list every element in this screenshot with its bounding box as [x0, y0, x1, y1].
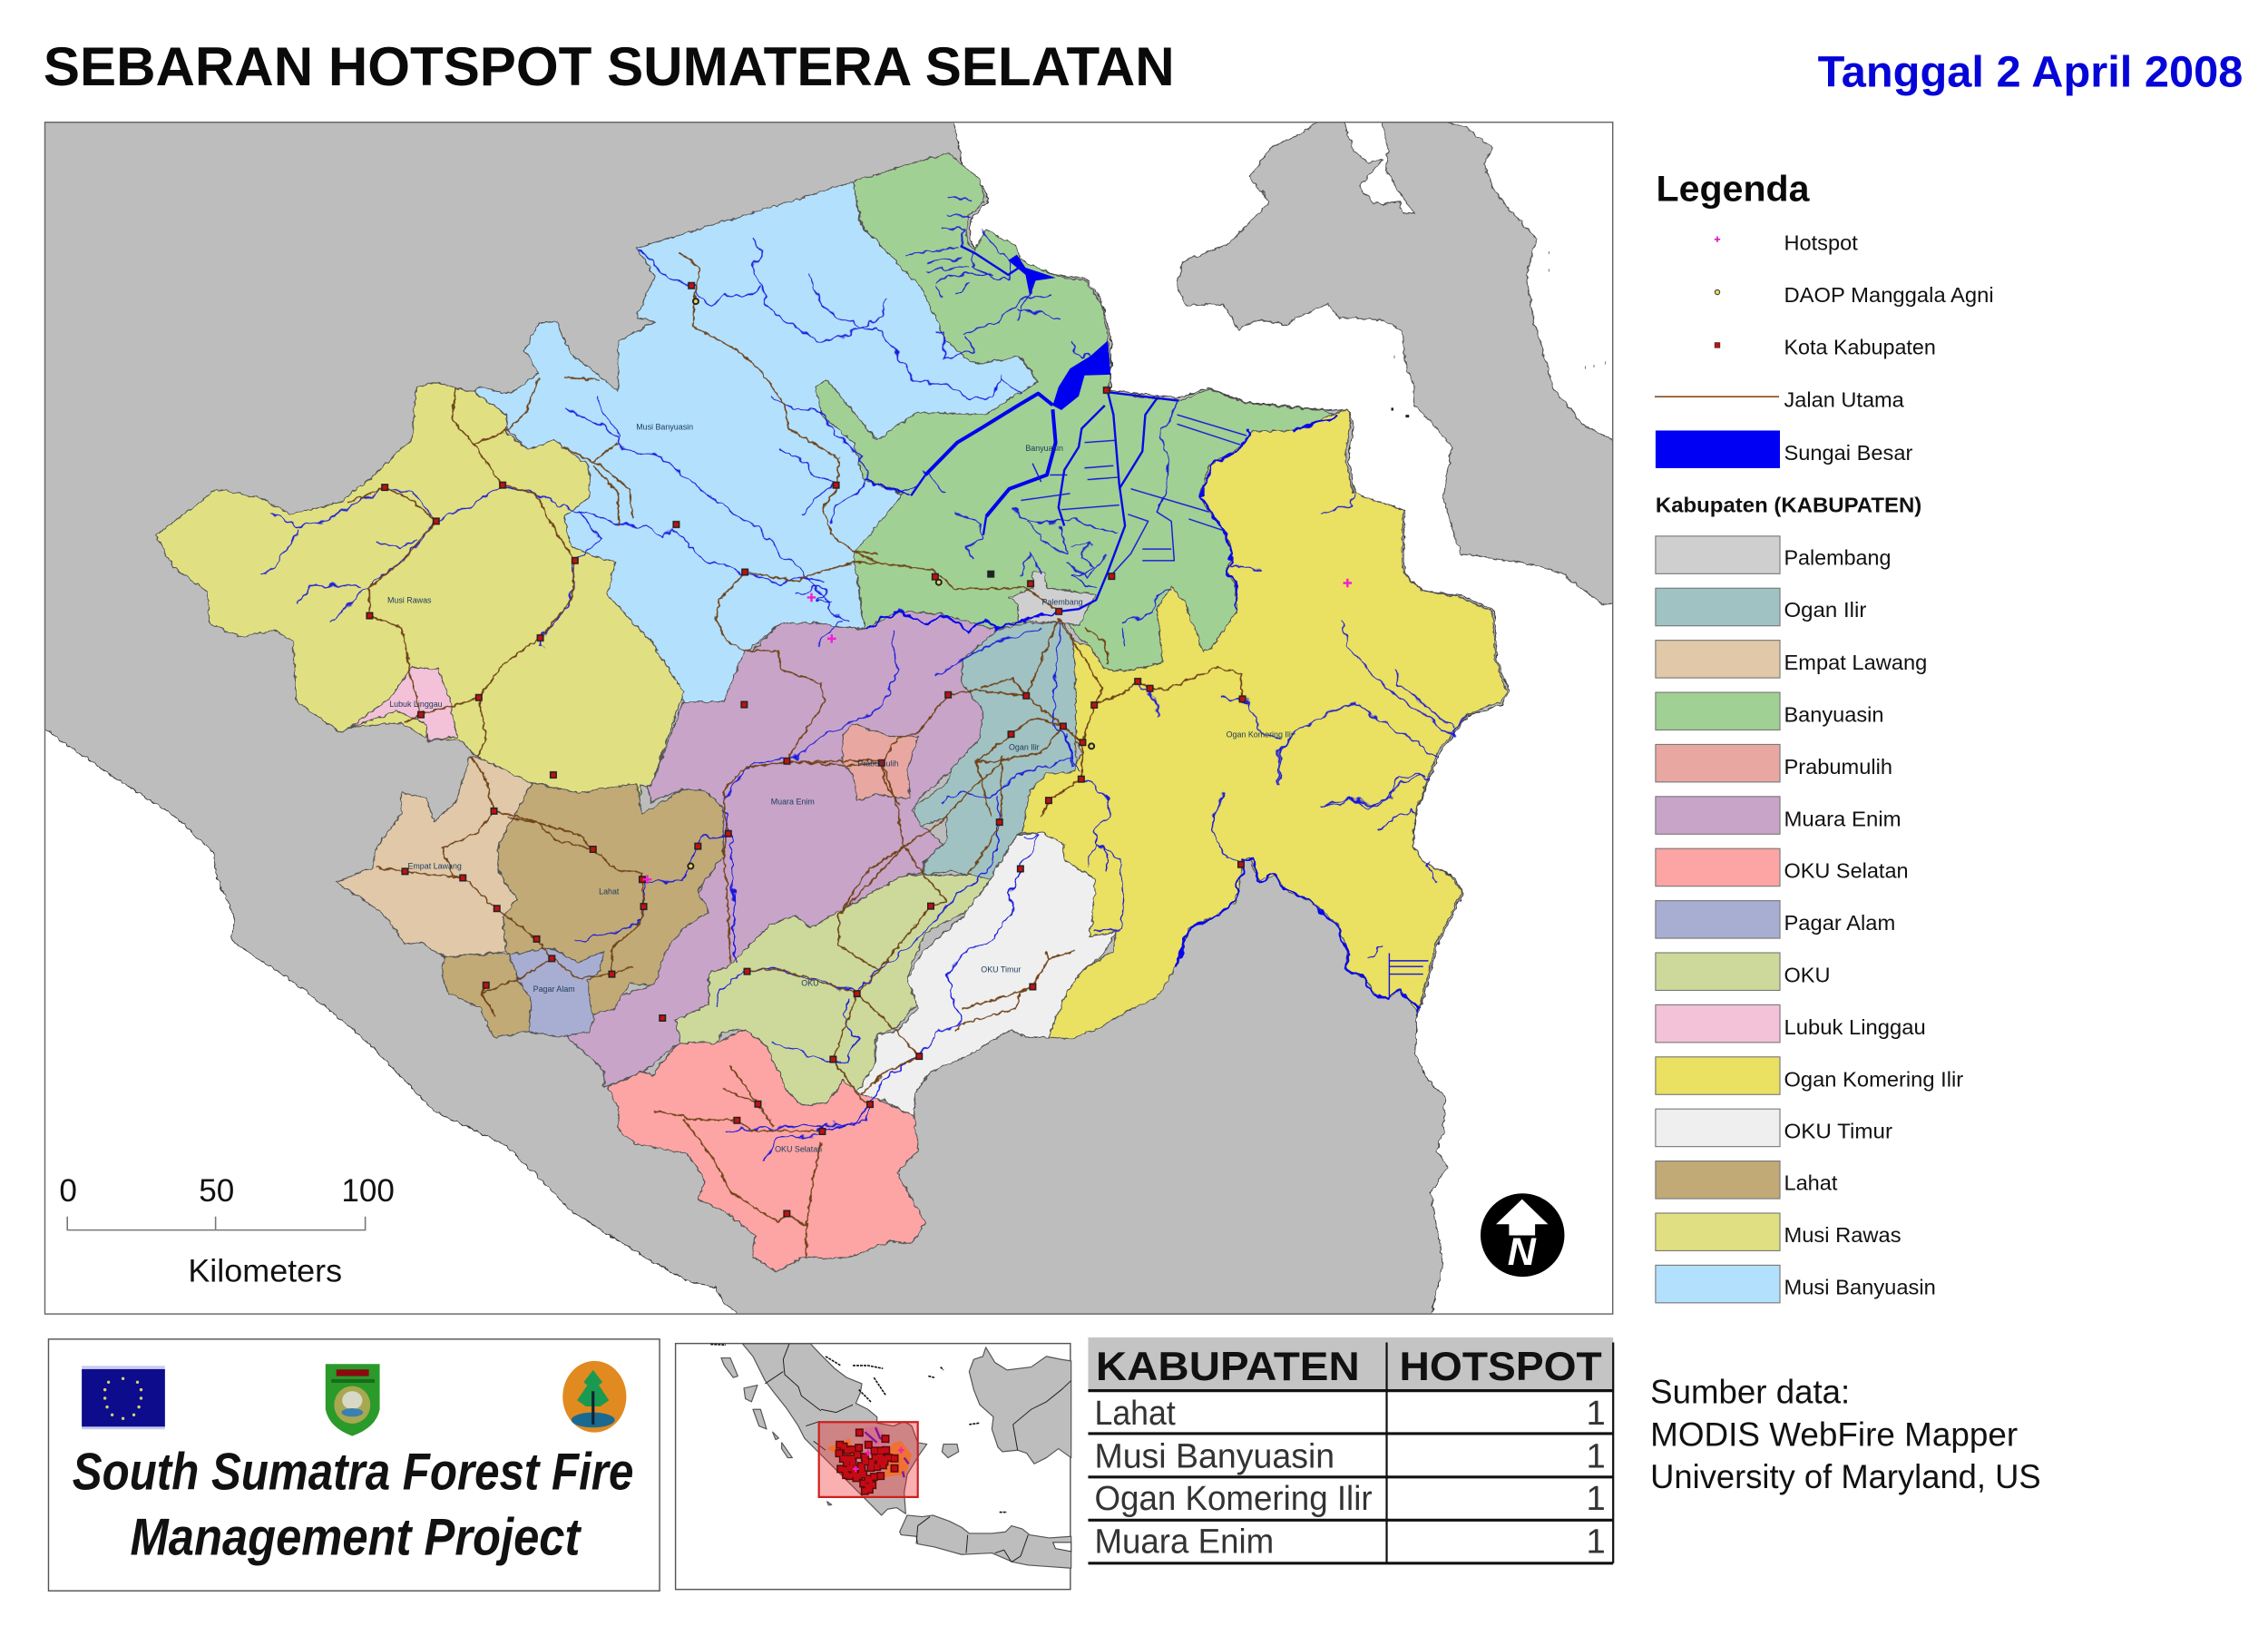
legend: DAOP Manggala Agni: DAOP Manggala Agni: [1784, 283, 1994, 307]
icon: South Sumatra shield: [326, 1364, 380, 1436]
kabupaten: Banyuasin: [816, 153, 1339, 671]
icon: north arrow: N: [1508, 1230, 1537, 1274]
small islands: [1391, 253, 1606, 416]
kabupaten: Empat Lawang: [337, 757, 532, 957]
region labels: Empat Lawang: [407, 862, 462, 871]
meandering border rivers: [865, 416, 1417, 1010]
legend labels: [1784, 546, 1963, 1298]
panel: project logos: [48, 1339, 660, 1591]
table: hotspots per kabupaten: 1: [1586, 1436, 1606, 1475]
hotspot markers: [643, 579, 1352, 884]
inset extent box: [819, 1422, 918, 1497]
table: hotspots per kabupaten: Musi Banyuasin: [1094, 1436, 1334, 1475]
icon: forestry emblem: [562, 1361, 626, 1433]
icon: north arrow: [1481, 1193, 1564, 1277]
kabupaten: Prabumulih: [843, 724, 918, 801]
legend: [1655, 170, 1994, 1303]
table: hotspots per kabupaten: [1088, 1337, 1613, 1563]
legend labels: Ogan Ilir: [1784, 598, 1867, 622]
rivers south-west: [575, 810, 870, 1161]
inset islands: [721, 1358, 959, 1505]
legend labels: OKU Selatan: [1784, 859, 1909, 883]
region labels: Musi Rawas: [387, 596, 432, 605]
town markers: [369, 286, 1243, 1214]
project name: South Sumatra Forest Fire: [73, 1444, 633, 1502]
region labels: Lubuk Linggau: [389, 700, 443, 709]
legend subheading: Kabupaten (KABUPATEN): [1656, 494, 1921, 517]
table: hotspots per kabupaten: KABUPATEN: [1096, 1345, 1360, 1389]
scale bar: [59, 1173, 395, 1288]
scale bar: Kilometers: [188, 1253, 342, 1288]
panel: inset locator map: [676, 1344, 1071, 1590]
main roads: [347, 252, 1243, 1257]
legend labels: OKU Timur: [1784, 1120, 1892, 1143]
table: hotspots per kabupaten: HOTSPOT: [1400, 1345, 1602, 1389]
roads north-west: [347, 252, 1103, 817]
region labels: Ogan Ilir: [1009, 742, 1040, 751]
kabupaten: Musi Rawas: [155, 382, 683, 803]
rivers south-east: [819, 733, 1436, 1131]
inset internal boundaries and island chains: [765, 1344, 1071, 1562]
kabupaten: OKU Timur: [855, 833, 1116, 1116]
scale bar: 100: [341, 1173, 395, 1209]
kabupaten: Lubuk Linggau: [351, 667, 457, 741]
large river estuary: [1008, 255, 1110, 410]
legend labels: Banyuasin: [1784, 703, 1883, 727]
legend swatches: [1656, 536, 1780, 1303]
minor rivers: [264, 197, 1466, 1161]
date heading: Tanggal 2 April 2008: [1818, 49, 2243, 97]
region labels: Lahat: [599, 886, 620, 896]
map frame: [44, 122, 1613, 1314]
legend labels: Empat Lawang: [1784, 651, 1927, 674]
kabupaten: Muara Enim: [568, 612, 998, 1087]
legend: Kota Kabupaten: Kota Kabupaten: [1784, 336, 1936, 359]
legend: Kota Kabupaten: [1715, 336, 1936, 359]
kabupaten: Musi Banyuasin: [474, 181, 1038, 701]
icon: EU flag: [82, 1366, 165, 1429]
legend heading: Legenda: [1657, 170, 1810, 210]
region labels: Muara Enim: [771, 797, 815, 806]
region labels: [387, 423, 1294, 1153]
inset hotspots: [853, 1447, 904, 1472]
legend labels: Palembang: [1784, 546, 1891, 570]
region labels: Prabumulih: [857, 759, 898, 768]
scale bar: 0: [59, 1173, 77, 1209]
province and surrounding land polygons: [36, 112, 1628, 1324]
legend: Jalan Utama: Jalan Utama: [1784, 388, 1904, 412]
region labels: Palembang: [1042, 597, 1083, 606]
inset Java: [900, 1515, 1071, 1568]
table: hotspots per kabupaten: Ogan Komering Ilir: [1094, 1479, 1373, 1518]
title: SEBARAN HOTSPOT SUMATERA SELATAN: [44, 35, 1175, 97]
legend labels: OKU: [1784, 964, 1830, 987]
legend labels: Pagar Alam: [1784, 911, 1895, 935]
panel: project logos: Management Project: [131, 1508, 582, 1566]
table: hotspots per kabupaten: 1: [1586, 1479, 1606, 1518]
data source note: MODIS WebFire Mapper: [1650, 1415, 2018, 1453]
big rivers: [925, 394, 1056, 516]
legend labels: Musi Banyuasin: [1784, 1275, 1936, 1298]
legend labels: Muara Enim: [1784, 807, 1901, 830]
region labels: Ogan Komering Ilir: [1227, 730, 1294, 740]
kabupaten: Lahat: [441, 783, 723, 1037]
legend labels: Prabumulih: [1784, 755, 1892, 779]
inset province fill: [827, 1438, 912, 1477]
legend: hotspot: Hotspot: [1784, 230, 1858, 254]
rivers north-west: [264, 241, 1041, 799]
table: hotspots per kabupaten: 1: [1586, 1394, 1606, 1433]
legend: Sungai Besar: [1656, 430, 1913, 468]
table: hotspots per kabupaten: Muara Enim: [1094, 1523, 1274, 1562]
kabupaten: OKU: [676, 875, 991, 1106]
region labels: OKU Timur: [981, 965, 1021, 974]
straight canals: [1021, 415, 1428, 999]
kabupaten: Ogan Komering Ilir: [1022, 408, 1507, 1039]
land: Bangka island: [1178, 112, 1628, 604]
region labels: Musi Banyuasin: [636, 423, 693, 432]
main map: [36, 112, 1628, 1324]
kabupaten: OKU Selatan: [608, 1030, 925, 1272]
rivers east: [905, 197, 1466, 806]
roads south: [376, 757, 1074, 1257]
inset town cluster: [839, 1433, 894, 1491]
kabupaten: Ogan Ilir: [915, 623, 1076, 880]
legend labels: Ogan Komering Ilir: [1784, 1067, 1963, 1091]
kabupaten: Pagar Alam: [510, 947, 604, 1037]
table: hotspots per kabupaten: Lahat: [1094, 1394, 1176, 1433]
table: hotspots per kabupaten: 1: [1586, 1523, 1606, 1562]
inset Borneo: [969, 1347, 1071, 1464]
legend labels: Musi Rawas: [1784, 1223, 1901, 1247]
data source note: University of Maryland, US: [1650, 1458, 2041, 1495]
scale bar: 50: [199, 1173, 234, 1209]
region labels: OKU Selatan: [775, 1144, 822, 1153]
data source note: Sumber data:: [1650, 1373, 1850, 1410]
region labels: OKU: [801, 979, 819, 988]
roads north-east: [1084, 628, 1243, 704]
legend: hotspot: [1715, 230, 1858, 254]
kabupaten: Palembang: [1010, 573, 1096, 625]
land: Sumatra surroundings: [36, 113, 1509, 1324]
inset Sumatra: [742, 1344, 927, 1515]
DAOP markers: [690, 301, 1091, 867]
data source note: [1650, 1373, 2041, 1495]
major rivers: [911, 246, 1178, 612]
region labels: Banyuasin: [1025, 444, 1063, 453]
legend labels: Lahat: [1784, 1171, 1838, 1194]
legend labels: Lubuk Linggau: [1784, 1015, 1926, 1039]
region labels: Pagar Alam: [533, 984, 575, 994]
legend: Sungai Besar: Sungai Besar: [1784, 441, 1913, 465]
